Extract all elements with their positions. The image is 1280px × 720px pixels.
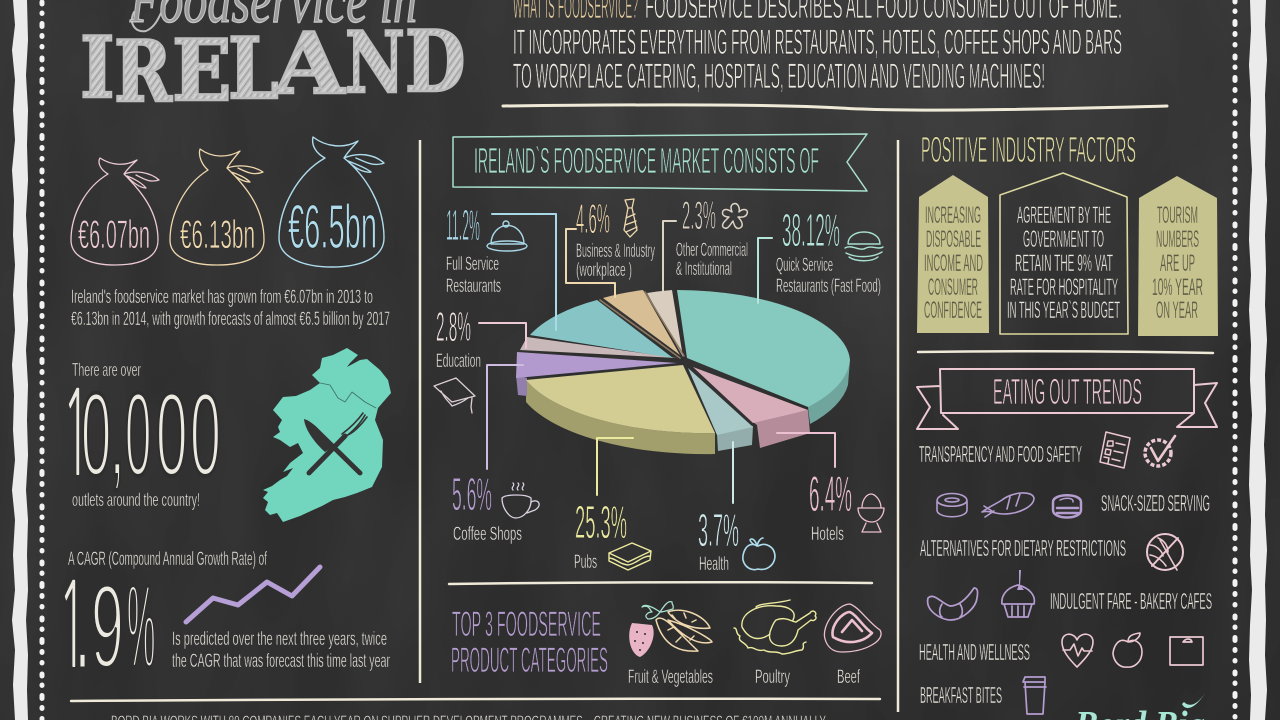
icon: beef (824, 604, 881, 652)
pie sides (516, 360, 850, 454)
label: hotels: Hotels (811, 524, 844, 545)
icon: heart (1062, 634, 1093, 667)
icon: cupcake (1002, 570, 1034, 617)
leader lines (479, 214, 835, 503)
big number: 10,000: 1 (62, 374, 91, 492)
product categories: PRODUCT CATEGORIES (451, 641, 608, 680)
outlets stat (62, 360, 221, 510)
big number: 10,000: , (109, 369, 125, 500)
big number: 10,000: 0 (125, 370, 151, 501)
label: other commercial and institutional: 2.3% (682, 194, 716, 238)
product categories: Beef (837, 667, 860, 688)
trend: snack-sized serving (937, 490, 1210, 518)
banner: market consists of (453, 134, 867, 191)
market growth text (71, 287, 390, 330)
label: business and industry: (workplace ) (576, 260, 632, 281)
pie chart (516, 290, 850, 454)
icon: asterisk flower (722, 204, 747, 228)
slice: full service (530, 300, 673, 358)
slice: business and industry (603, 290, 680, 355)
trend: indulgent fare (928, 570, 1212, 620)
title: L (228, 20, 279, 118)
icon: apple (1113, 633, 1142, 667)
big number: 10,000: 0 (190, 369, 221, 501)
product categories (451, 600, 881, 688)
icon: apple (743, 538, 775, 570)
big number: 10,000 (62, 368, 221, 501)
text: GOVERNMENT TO (1023, 226, 1104, 253)
factor: tourism: ARE UP (1160, 250, 1195, 277)
logo: Bord Bia (1074, 693, 1205, 720)
label: coffee shops (452, 468, 539, 545)
label: quick service restaurants: Quick Service (776, 255, 833, 276)
factor: tourism: ON YEAR (1156, 297, 1198, 324)
factor: tourism: NUMBERS (1156, 226, 1199, 253)
icon: check badge (1145, 436, 1175, 466)
icon: knife and fork (304, 413, 367, 473)
title (80, 0, 465, 122)
intro text (513, 0, 1122, 96)
slice: education (520, 337, 677, 358)
label: education (434, 303, 481, 413)
banner: eating out trends (917, 369, 1217, 429)
icon: tie (624, 199, 637, 237)
market growth text: Ireland's foodservice market has grown from €6.07bn in 2013 to (71, 287, 373, 308)
icon: croissant (928, 588, 978, 620)
market growth text: €6.13bn in 2014, with growth forecasts of almost €6.5 billion by 2017 (71, 309, 390, 330)
CAGR stat (58, 549, 390, 693)
bag: 2017 forecast (279, 137, 384, 267)
bag: 2014: €6.13bn (180, 213, 255, 257)
icon: sandwich (609, 543, 651, 570)
title: D (405, 14, 465, 112)
title: E (172, 22, 232, 121)
slice: hotels (693, 367, 808, 423)
icon: graduation cap (434, 378, 475, 413)
title: N (345, 13, 405, 112)
outlets stat: outlets around the country! (72, 490, 200, 510)
label: other commercial and institutional (676, 194, 748, 280)
icon: poultry (734, 600, 816, 654)
icon: takeaway cup (1023, 677, 1046, 714)
label: health: Health (699, 554, 729, 575)
text: AGREEMENT BY THE (1017, 202, 1111, 229)
label: pubs (574, 496, 651, 573)
bag: 2013: €6.07bn (78, 213, 150, 257)
trend: breakfast bites: BREAKFAST BITES (920, 682, 1002, 708)
factor: tourism: 10% YEAR (1152, 274, 1203, 301)
label: quick service restaurants: Restaurants (Fast Food) (776, 276, 881, 297)
big number: 1.9%: . (76, 562, 89, 693)
text: 2.8% (436, 303, 471, 350)
text: INCREASING (925, 202, 981, 229)
label: full service restaurants: Restaurants (446, 276, 501, 297)
factor: tourism: TOURISM (1157, 202, 1198, 229)
label: business and industry (576, 195, 655, 281)
line chart: growth (186, 567, 320, 622)
label: pubs: 25.3% (575, 496, 627, 548)
icon: coffee cup (502, 483, 539, 518)
slice: pubs (526, 365, 715, 433)
icon: burger (845, 232, 883, 261)
product categories: Poultry (755, 667, 790, 688)
text: CONSUMER (928, 274, 978, 301)
factor: VAT rate (1000, 173, 1128, 334)
icons: sushi (937, 493, 1081, 518)
slice: health (688, 368, 753, 435)
text: INCOME AND (924, 250, 983, 277)
trend: transparency and food safety (919, 432, 1175, 468)
title: A (273, 14, 346, 113)
money bags chart (71, 137, 384, 267)
product categories: Fruit & Vegetables (628, 667, 713, 688)
icon: no wheat (1147, 534, 1183, 570)
map of Ireland with cutlery (263, 348, 391, 522)
slice: other commercial (647, 290, 683, 357)
trend: health and wellness: HEALTH AND WELLNESS (919, 639, 1030, 665)
label: health (698, 504, 775, 575)
label: hotels (809, 466, 884, 545)
slice: coffee shops (516, 352, 677, 378)
icon: scale (1170, 637, 1203, 665)
label: other commercial and institutional: & Institutional (676, 259, 732, 280)
label: coffee shops: Coffee Shops (453, 524, 522, 545)
big number: 1.9% (58, 561, 155, 693)
big number: 1.9%: % (127, 562, 155, 693)
slice: quick service (677, 290, 850, 407)
label: pubs: Pubs (574, 552, 597, 573)
icon: clipboard (1100, 432, 1130, 468)
bag: 2014 (170, 149, 264, 265)
label: full service restaurants: 11.2% (446, 201, 480, 250)
label: education: Education (436, 351, 481, 372)
CAGR stat: the CAGR that was forecast this time last year (172, 651, 390, 672)
trend: breakfast bites (920, 677, 1046, 714)
outlets stat: There are over (72, 360, 141, 380)
text: Other Commercial (676, 240, 748, 261)
icon: fruit and vegetables (629, 602, 712, 657)
bag: 2017 forecast: €6.5bn (288, 193, 377, 262)
big number: 1.9%: 9 (91, 561, 124, 692)
icon: egg cup (858, 494, 884, 532)
CAGR stat: A CAGR (Compound Annual Growth Rate) of (68, 549, 267, 570)
label: health: 3.7% (698, 504, 739, 556)
product categories: TOP 3 FOODSERVICE (452, 605, 601, 644)
big number: 10,000: 0 (81, 370, 111, 501)
text: RETAIN THE 9% VAT (1015, 250, 1113, 277)
label: coffee shops: 5.6% (452, 468, 492, 520)
title: I (80, 18, 115, 117)
trend: dietary restrictions (920, 534, 1183, 570)
heading: top 3 categories (451, 605, 608, 680)
text: DISPOSABLE (926, 226, 981, 253)
label: quick service restaurants: 38.12% (782, 204, 840, 256)
label: business and industry: 4.6% (576, 195, 610, 242)
CAGR stat: Is predicted over the next three years, twice (172, 629, 387, 650)
big number: 1.9%: 1 (58, 566, 87, 684)
label: full service restaurants (446, 201, 527, 297)
factor: tourism (1138, 176, 1218, 336)
text: CONFIDENCE (924, 297, 982, 324)
title: R (114, 24, 173, 122)
icon: cloche (487, 221, 527, 251)
bag: 2013 (71, 158, 159, 265)
label: hotels: 6.4% (809, 466, 852, 522)
label: quick service restaurants (776, 204, 883, 297)
text: Business & Industry (576, 241, 655, 262)
big number: 10,000: 0 (156, 368, 188, 500)
label: full service restaurants: Full Service (446, 254, 499, 275)
factor: disposable income (917, 175, 989, 333)
